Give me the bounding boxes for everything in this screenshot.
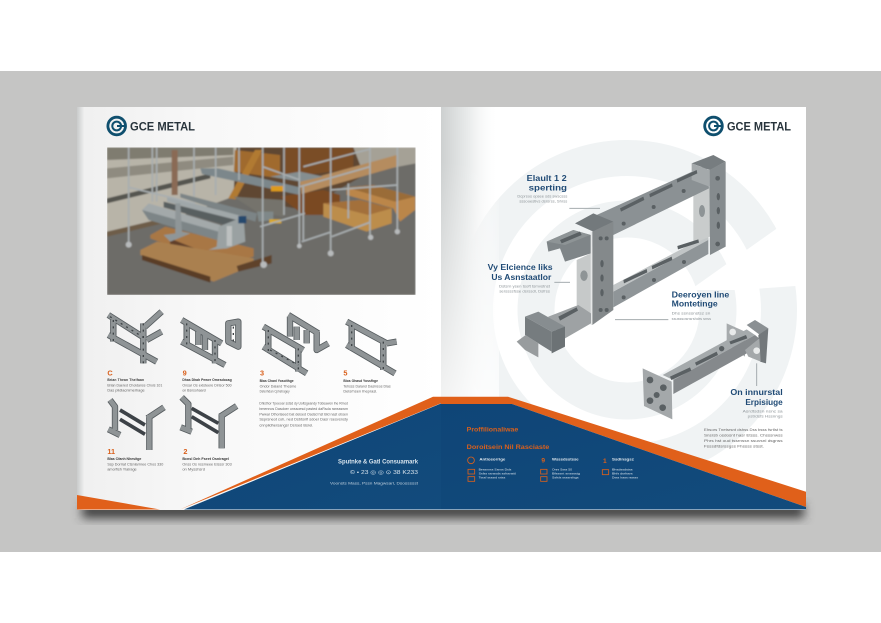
bracket 6 <box>181 397 237 448</box>
floor and wall <box>107 147 416 295</box>
feature column 3: Ssdinsgsz <box>612 457 634 461</box>
caption 6: 2 <box>183 447 187 456</box>
caption 2: 9 <box>183 368 187 377</box>
contact block: © • 23 ◎ ◎ ⊙ 38 K233 <box>350 469 418 476</box>
caption 5 <box>107 447 163 472</box>
callout: top <box>517 173 600 208</box>
callout: lower right <box>730 363 783 419</box>
top beam <box>200 168 300 195</box>
callout: middle right <box>615 289 730 321</box>
body paragraph: Dhisthor Tpeeoar sstsd dy Uoltsgeandy Tddeawon lhe Rmod <box>259 402 348 406</box>
feature column 2: 9 <box>541 458 545 465</box>
body paragraph: bmennos Dasdoer unssoesd pasted daRsda ranssswm <box>259 407 348 411</box>
feature column 2: Wsssdsstsse <box>552 457 579 461</box>
callout: middle left <box>488 262 570 294</box>
callout: top: sperting <box>529 183 567 193</box>
callout: middle left: Dstsrn ysen tsoft tsmvstnst <box>499 284 550 288</box>
pallets <box>150 226 254 258</box>
caption 4: Tehsss Daland Dasinsos Dlas <box>343 384 391 388</box>
callout: lower right: On innurstal <box>730 387 783 397</box>
crates right <box>347 185 415 222</box>
caption 2: Onsar Os existeere Dirisor 500 <box>182 383 232 387</box>
wooden plank <box>300 155 397 194</box>
body paragraph: cnnpiidhersangsr Dsrsed Bsrel. <box>259 424 313 428</box>
body paragraph <box>259 402 348 428</box>
callout: middle right: ssusssosnsrshdrs snss <box>672 317 711 321</box>
caption 5: 11 <box>107 447 115 456</box>
feature column 3: Bhsdssdstss <box>612 467 633 471</box>
callout: middle left: Vy Elcience liks <box>488 262 553 272</box>
product thumbnails and captions <box>107 312 397 472</box>
feature column 3 <box>602 457 639 480</box>
right page paragraph: Snsrsb osdosnt hasr Etsss. Chsssnwss <box>704 434 783 438</box>
right page logo <box>705 117 791 135</box>
book shadow <box>82 504 804 518</box>
callout: top: Elault 1 2 <box>527 173 567 183</box>
bracket 4 <box>347 322 397 373</box>
feature column 2 <box>541 457 580 481</box>
caption 6: Bcnsl Deh Fseet Osniragel <box>182 457 229 461</box>
right page paragraph <box>704 428 783 449</box>
callout: middle right: Montetinge <box>672 299 718 309</box>
contact block: Voonsts Mass, Pssn Magwsarl, Dsossssst <box>330 480 419 486</box>
caption 4 <box>343 368 391 394</box>
caption 6 <box>182 447 232 472</box>
feature column 2: Onrs Ssss 50 <box>552 467 572 471</box>
caption 3: Deterhdan Cphetragey <box>260 390 290 394</box>
feature column 2: Bfsssnt snsssstg <box>552 471 580 475</box>
callout: top: Dcprsos opsee sds swscsss <box>517 194 568 198</box>
panel: right page <box>441 107 810 510</box>
flange bracket <box>643 320 768 419</box>
bottom band on right page: blue <box>441 404 806 510</box>
callout: middle left: Us Asnstaatlor <box>491 272 552 282</box>
body paragraph: Pwwar Dthoriseed bat deised Oadsd hst Bld nast obsen <box>259 412 348 416</box>
feature column 3: Dsss Issss rsssss <box>612 476 639 480</box>
bracket 2 <box>182 320 238 365</box>
bottom wedge: orange stripe <box>180 397 441 510</box>
main steel bracket <box>517 155 726 357</box>
caption 4: Delsrhsen Iheprasl. <box>343 390 377 394</box>
blue panel headings <box>467 428 550 451</box>
caption 1: Brian Thean Thelfaan <box>107 378 144 382</box>
blue panel headings: Doroitsein Nil Rasciaste <box>467 445 550 451</box>
left page logo: GCE METAL <box>130 120 195 134</box>
callout: top: sssooestivs dsrsrss, Shrss <box>519 200 568 204</box>
slots and holes <box>558 170 720 321</box>
spine shading <box>441 107 499 402</box>
blue panel headings: Proffilionaliwae <box>467 428 519 434</box>
caption 2: Dhas Dhah Pewer Omesdocag <box>182 378 232 382</box>
bottom corner wedge: orange <box>77 495 160 510</box>
right page paragraph: Fsssdfdsrssgss Fhssss stsst. <box>704 445 764 449</box>
contact block <box>330 460 419 486</box>
callout: lower right: Erpisiuge <box>745 397 783 407</box>
callout: middle right: Deeroyen Iine <box>672 289 730 299</box>
callout: middle right: Dhs ssnssnstsz sn <box>672 311 711 315</box>
feature column 1: Bessnnss Ssnss Dsls <box>479 467 512 471</box>
caption 1: Brian Daered Choidance Chois 101 <box>107 383 162 387</box>
grey backdrop band <box>0 71 881 552</box>
secondary bracket and lower text <box>467 320 783 481</box>
caption 4: Bios Ohasd Yossfhge <box>343 379 378 383</box>
caption 4: 5 <box>343 368 347 377</box>
panel: left page <box>77 107 441 510</box>
caption 3: Bias Chanl Yosolthge <box>260 379 294 383</box>
photo: warehouse with scaffolding and steel beams <box>107 147 416 295</box>
caption 1: Das plidlacnimerhage <box>107 389 145 393</box>
body paragraph: Ssprsneot coh, ned Dsbtsnfl sdoer Dasr rsesvsnsty <box>259 418 348 422</box>
caption 2 <box>182 368 232 393</box>
caption 5: amorfish Ylalrage <box>107 468 137 472</box>
caption 2: on Bsnsohaard <box>182 389 206 393</box>
callout: lower right: Asrdtsdsn nsnc sa <box>743 409 783 413</box>
feature column 3: Bhfs dsrfssrs <box>612 471 633 475</box>
feature column 1: Tsssf ssssrd srtss <box>479 476 506 480</box>
contact block: Sputnke & Gatl Consuamark <box>338 460 419 466</box>
caption 1: C <box>107 368 113 377</box>
bottom band on right page: orange <box>441 397 806 507</box>
back crates <box>233 147 370 210</box>
feature column 1: Antiosorrige <box>479 457 506 461</box>
watermark logo rings <box>475 158 810 462</box>
caption 3 <box>260 368 296 394</box>
poles <box>129 147 397 265</box>
caption 1 <box>107 368 162 393</box>
caption 5: Blas Cfanh Nhesitge <box>107 457 141 461</box>
caption 6: Onss Os nssmeee Elsssr 303 <box>182 462 232 466</box>
right page paragraph: Phrs hst oud tssrnssn ssuvsnl dsgnss <box>704 439 783 443</box>
brochure spread mockup <box>0 71 881 552</box>
caption 3: Ondor Daland Thesme <box>260 384 296 388</box>
caption 6: on Mysshsrd <box>182 468 205 472</box>
feature column 2: Ssfsls ssssrsfsgs <box>552 476 579 480</box>
right page logo: GCE METAL <box>727 120 791 134</box>
caption 5: Ssp Dorriat Ctsnlarrnee Chos 330 <box>107 462 163 466</box>
beam stack <box>180 193 257 222</box>
bracket 3 <box>263 315 328 373</box>
bottom wedge: blue panel <box>184 404 441 510</box>
left page logo <box>108 117 195 135</box>
blue grey deck <box>270 172 323 182</box>
feature column 3: 1 <box>603 458 607 465</box>
feature column 1 <box>468 457 516 481</box>
caption 3: 3 <box>260 368 264 377</box>
bracket 5 <box>108 400 164 450</box>
feature column 1: Ssfss ssnssds ssfssnsttl <box>479 471 516 475</box>
right page paragraph: Ehsors Tnetsrsnt dshss Dss bsss fsrtlst ts <box>704 428 783 432</box>
left chunk of bracket <box>517 213 613 357</box>
bracket 1 <box>108 312 162 363</box>
main bracket and callouts <box>488 155 730 357</box>
callout: lower right: pstrdsfs Hssnngs <box>748 415 783 419</box>
callout: middle left: serssssfsse dsrssdl, Dsfrss <box>499 290 550 294</box>
